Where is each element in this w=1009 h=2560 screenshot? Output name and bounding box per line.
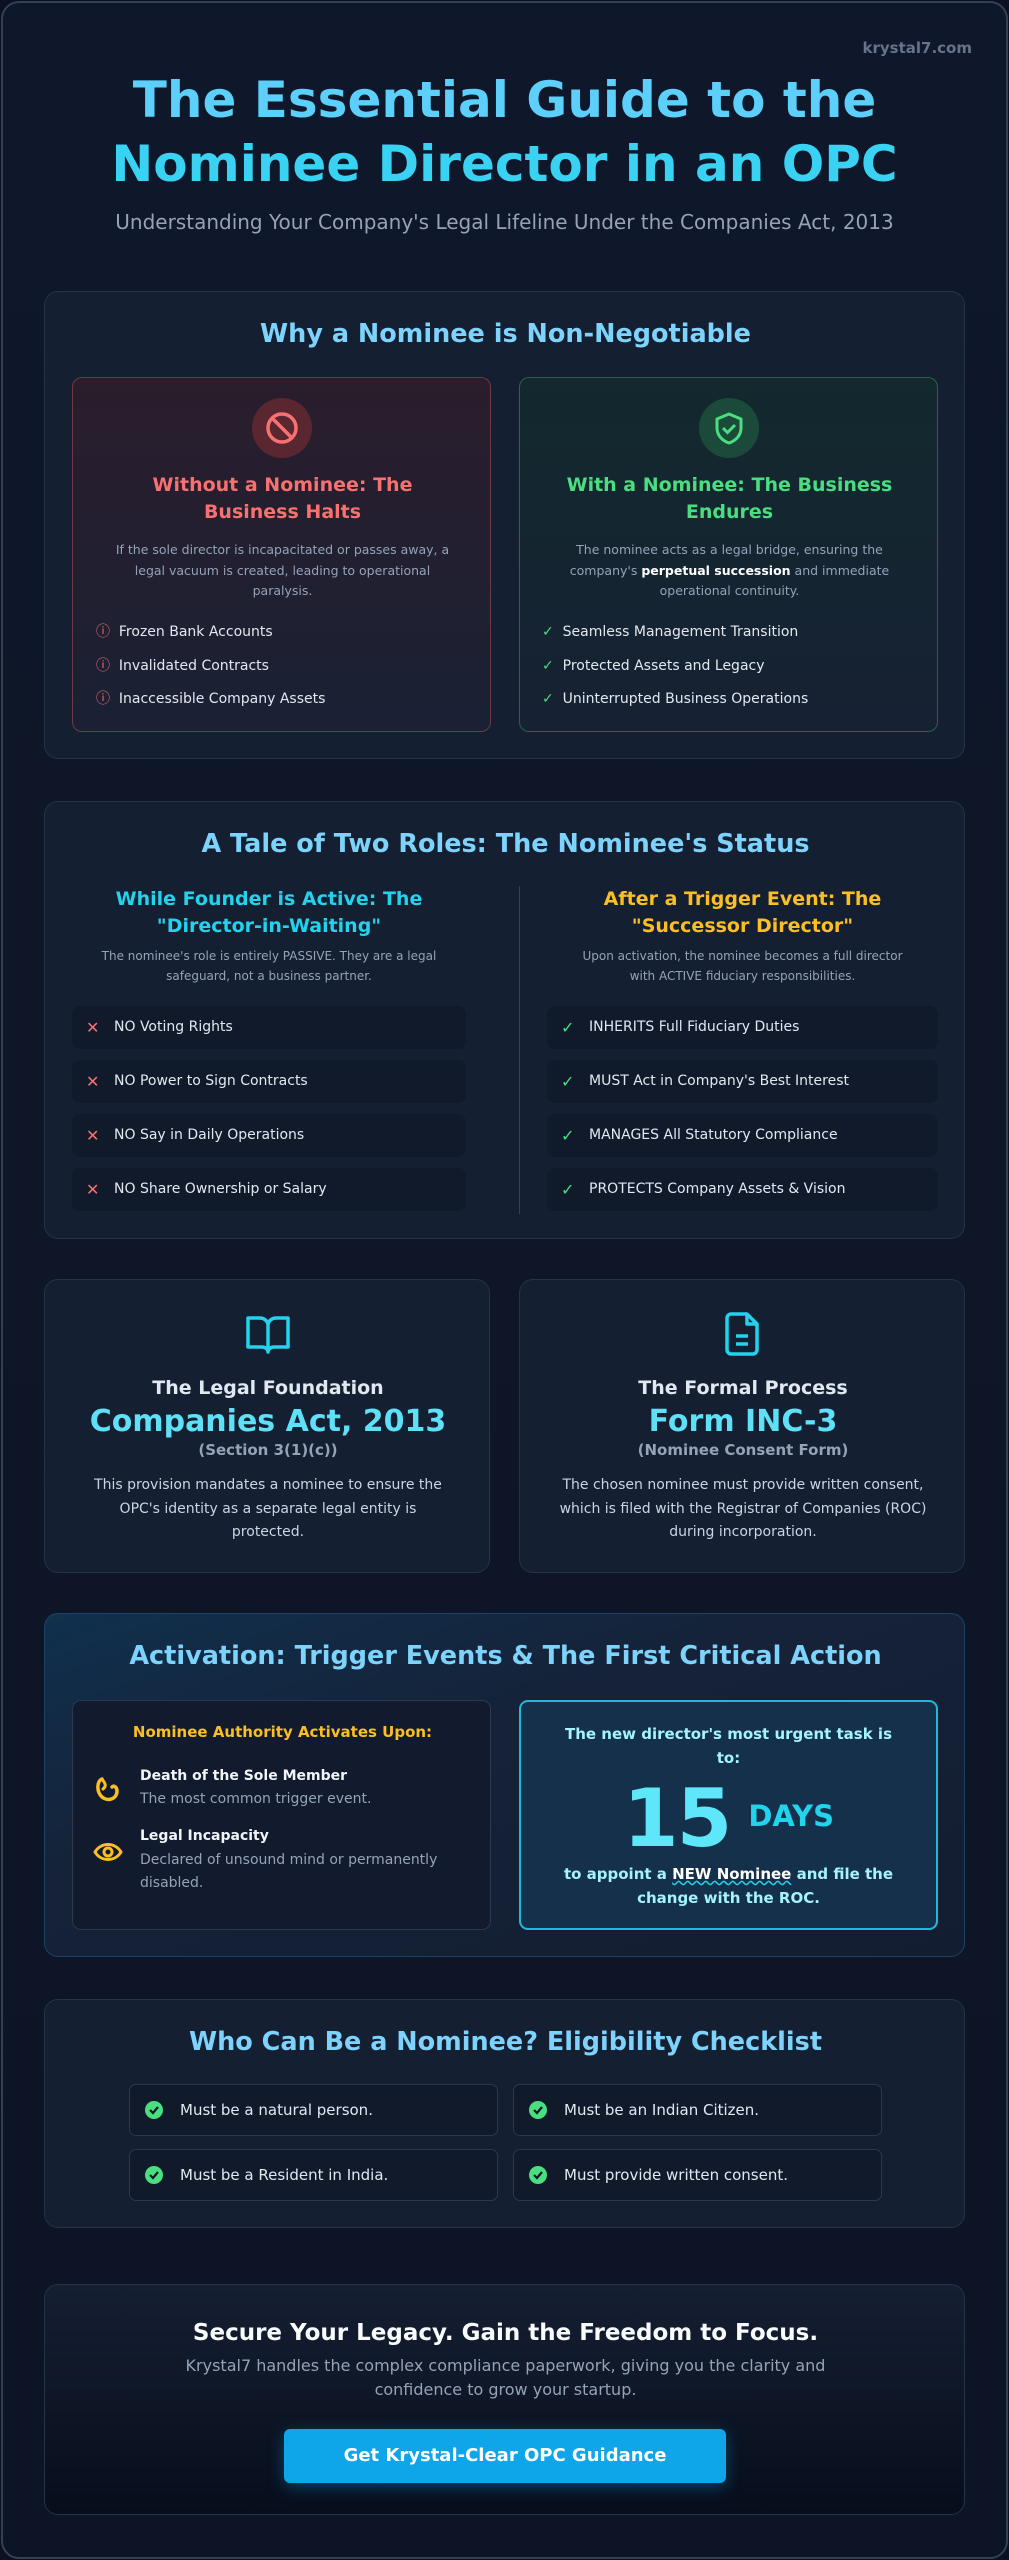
column: passive [86,888,436,1199]
column: active: ✓ [561,1018,574,1037]
text: Companies Act, 2013 [90,1404,446,1439]
card: without nominee [72,377,491,732]
column: active: MANAGES All Statutory Compliance [589,1127,838,1143]
icon: book [246,1316,290,1354]
card: triggers: The most common trigger event. [140,1791,371,1807]
list: benefits: ✓ Seamless Management Transition [542,624,798,640]
icon: ban [252,398,312,458]
text: (Nominee Consent Form) [638,1441,848,1459]
text: Form INC-3 [649,1404,837,1439]
column: passive: NO Power to Sign Contracts [114,1073,308,1089]
column: passive: The nominee's role is entirely PASSIVE. They are a legal safeguard, not a business partner. [102,949,436,983]
column: active: INHERITS Full Fiduciary Duties [589,1019,799,1035]
column: passive: "Director-in-Waiting" [157,915,381,937]
panel: call to action [44,2284,965,2515]
card: triggers: Declared of unsound mind or permanently disabled. [140,1852,437,1891]
list: benefits: ✓ Uninterrupted Business Operations [542,691,808,707]
card title [567,474,892,523]
card: triggers [72,1700,491,1930]
text [560,1377,926,1540]
big number: 15 DAYS [623,1772,834,1865]
title [111,71,898,193]
icon: eye [93,1843,123,1861]
button [284,2429,726,2483]
heading: Who Can Be a Nominee? Eligibility Checklist [189,2027,822,2057]
heading: Why a Nominee is Non-Negotiable [260,319,751,349]
text: The chosen nominee must provide written consent, which is filed with the Registrar of Companies (ROC) during incorporation. [560,1477,926,1540]
list: benefits: ✓ Protected Assets and Legacy [542,658,764,674]
subtitle: Understanding Your Company's Legal Lifeline Under the Companies Act, 2013 [115,210,894,234]
cta heading: Secure Your Legacy. Gain the Freedom to Focus. [193,2320,818,2346]
column: active: ✓ [561,1126,574,1145]
text: The Formal Process [638,1377,848,1399]
heading: Activation: Trigger Events & The First Critical Action [129,1641,882,1671]
description: If the sole director is incapacitated or passes away, a legal vacuum is created, leading to operational paralysis. [116,542,449,598]
list: consequences: ⓘ Invalidated Contracts [96,658,269,674]
button: Get Krystal-Clear OPC Guidance [344,2445,666,2466]
text: The Legal Foundation [152,1377,384,1399]
card: 15 days [519,1700,938,1930]
panel: two roles [44,801,965,1239]
panel: why nominee [44,291,965,759]
card: triggers: Nominee Authority Activates Upon: [133,1723,432,1741]
column: active: PROTECTS Company Assets & Vision [589,1181,845,1197]
column: active: ✓ [561,1072,574,1091]
text: (Section 3(1)(c)) [198,1441,338,1459]
checklist: Must be an Indian Citizen. [564,2101,759,2119]
column: passive: ✕ [86,1180,99,1199]
card title: Without a Nominee: The [153,474,412,496]
column: passive: NO Share Ownership or Salary [114,1181,327,1197]
list: consequences: ⓘ Frozen Bank Accounts [96,624,273,640]
column: active: After a Trigger Event: The [604,888,881,910]
brand: krystal7.com [863,39,972,57]
card title [153,474,412,523]
column: passive: ✕ [86,1018,99,1037]
description: The nominee acts as a legal bridge, ensuring the company's perpetual succession and immediate operational continuity. [570,542,889,598]
card title: With a Nominee: The Business [567,474,892,496]
column: passive: While Founder is Active: The [116,888,422,910]
icon: death [96,1777,119,1802]
column: active: Upon activation, the nominee becomes a full director with ACTIVE fiduciary responsibilities. [582,949,903,983]
card: with nominee [519,377,938,732]
panel: activation [44,1613,965,1957]
text [90,1377,446,1540]
card: triggers: Legal Incapacity [140,1828,269,1844]
checklist: Must be a natural person. [180,2101,373,2119]
panel: eligibility [44,1999,965,2228]
card: 15 days: to appoint a NEW Nominee and file the change with the ROC. [564,1865,893,1907]
icon: document [725,1312,759,1356]
text: This provision mandates a nominee to ensure the OPC's identity as a separate legal entity is protected. [94,1477,442,1540]
column: active [561,888,903,1199]
column: passive: NO Say in Daily Operations [114,1127,304,1143]
column: passive: NO Voting Rights [114,1019,233,1035]
panel: legal foundation [44,1279,490,1573]
card: 15 days: The new director's most urgent task is to: [565,1725,892,1767]
checklist: Must be a Resident in India. [180,2166,388,2184]
heading: A Tale of Two Roles: The Nominee's Status [201,829,810,859]
card title: Business Halts [204,501,361,523]
checklist [129,2084,882,2201]
list: consequences [96,624,325,707]
column: passive: ✕ [86,1072,99,1091]
column: active: ✓ [561,1180,574,1199]
panel: formal process [519,1279,965,1573]
list: benefits [542,624,808,707]
list: consequences: ⓘ Inaccessible Company Assets [96,691,325,707]
card title: Endures [686,501,773,523]
column: active: MUST Act in Company's Best Interest [589,1073,849,1089]
cta text: Krystal7 handles the complex compliance paperwork, giving you the clarity and confidence to grow your startup. [186,2356,825,2399]
card: triggers: Death of the Sole Member [140,1768,347,1784]
title: The Essential Guide to the [133,71,876,129]
title: Nominee Director in an OPC [111,135,898,193]
column: active: "Successor Director" [632,915,853,937]
checklist: Must provide written consent. [564,2166,788,2184]
icon: shield [699,398,759,458]
column: passive: ✕ [86,1126,99,1145]
